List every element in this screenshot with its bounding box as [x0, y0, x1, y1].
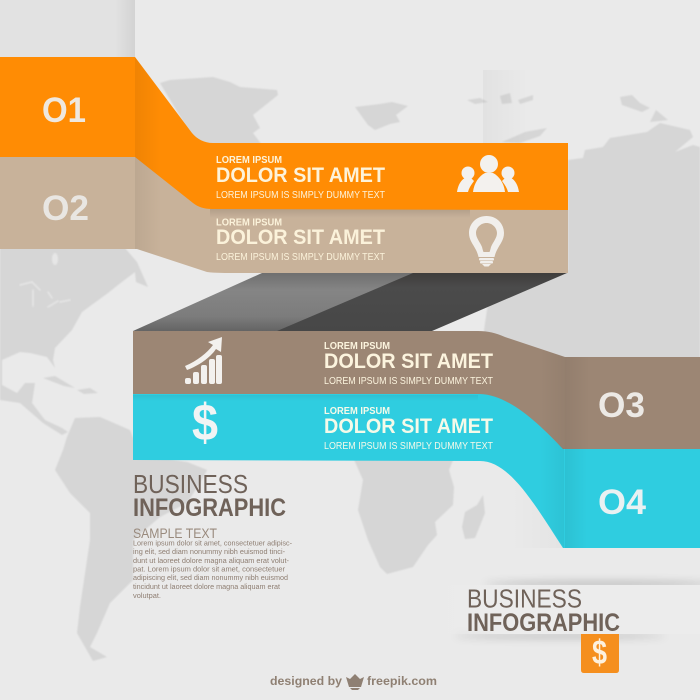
icon: dollar: $	[192, 394, 218, 452]
text block 02: LOREM IPSUM	[216, 218, 282, 228]
badge heading	[467, 584, 620, 637]
text block: sample text: SAMPLE TEXT	[133, 525, 217, 541]
text block 03: DOLOR SIT AMET	[324, 350, 493, 373]
icon: growth chart	[185, 337, 222, 384]
heading: business infographic: BUSINESS	[133, 469, 248, 499]
band 01: orange	[0, 57, 568, 210]
map: northern Canada	[160, 77, 278, 145]
footer credit: freepik.com	[367, 676, 437, 688]
text block 04: DOLOR SIT AMET	[324, 415, 493, 438]
number 01: O1	[42, 91, 86, 130]
text block 01: LOREM IPSUM IS SIMPLY DUMMY TEXT	[216, 189, 385, 201]
map lakes	[20, 253, 70, 307]
text block: sample text: adipiscing elit, sed diam nonummy nibh euismod	[133, 575, 288, 582]
text block 03	[324, 341, 493, 387]
icon: people	[457, 155, 519, 192]
text block 04: LOREM IPSUM IS SIMPLY DUMMY TEXT	[324, 440, 493, 452]
text block 03: LOREM IPSUM	[324, 341, 390, 352]
map: Asia	[484, 123, 700, 360]
map: Africa	[352, 455, 455, 574]
text block 02: LOREM IPSUM IS SIMPLY DUMMY TEXT	[216, 251, 385, 263]
text block: sample text: volutpat.	[133, 593, 161, 600]
dark section	[277, 273, 567, 331]
text block 04	[324, 406, 493, 452]
text block: sample text: ing elit, sed diam nonummy nibh euismod tinci-	[133, 549, 286, 556]
text block: sample text	[133, 525, 293, 600]
orange tab	[581, 634, 619, 673]
text block: sample text: Lorem ipsum dolor sit amet, consectetuer adipisc-	[133, 540, 293, 548]
number 04: O4	[598, 483, 647, 522]
footer credit	[270, 674, 437, 690]
ribbon strip	[430, 585, 700, 634]
map: North and Central America	[0, 248, 148, 435]
footer credit: designed by	[270, 676, 343, 688]
band 03: brown	[133, 331, 700, 455]
ribbon shadows	[455, 581, 700, 639]
text block 03: LOREM IPSUM IS SIMPLY DUMMY TEXT	[324, 375, 493, 387]
text block 02	[216, 218, 385, 263]
text block 01: DOLOR SIT AMET	[216, 164, 385, 187]
text block: sample text: pat. Lorem ipsum dolor sit amet, consectetuer	[133, 566, 286, 574]
badge: small ribbon with heading and dollar tab	[430, 581, 700, 673]
map: South America	[55, 417, 207, 661]
icon: light bulb	[469, 216, 504, 266]
text block 01	[216, 155, 385, 201]
band 04: cyan	[133, 394, 700, 548]
map: Arctic islands	[355, 93, 668, 143]
badge heading: BUSINESS	[467, 584, 582, 614]
ribbon back: dark grey fold	[133, 273, 567, 331]
heading: business infographic	[133, 469, 286, 522]
band 02: tan	[0, 156, 568, 273]
background folds	[0, 0, 565, 548]
heading: business infographic: INFOGRAPHIC	[133, 494, 286, 522]
mid grey section	[133, 273, 415, 331]
map: Caribbean islands	[43, 376, 98, 394]
text block: sample text: tincidunt ut laoreet dolore magna aliquam erat	[133, 584, 280, 591]
text block 04: LOREM IPSUM	[324, 406, 390, 417]
number 02: O2	[42, 189, 89, 228]
text block 02: DOLOR SIT AMET	[216, 226, 385, 249]
icon: crown	[346, 674, 364, 690]
tab dollar: $	[592, 634, 607, 672]
text block: sample text: dunt ut laoreet dolore magna aliquam erat volut-	[133, 558, 290, 565]
text block 01: LOREM IPSUM	[216, 155, 282, 166]
number 03: O3	[598, 386, 645, 425]
badge heading: INFOGRAPHIC	[467, 609, 620, 637]
map: Madagascar	[462, 495, 485, 539]
